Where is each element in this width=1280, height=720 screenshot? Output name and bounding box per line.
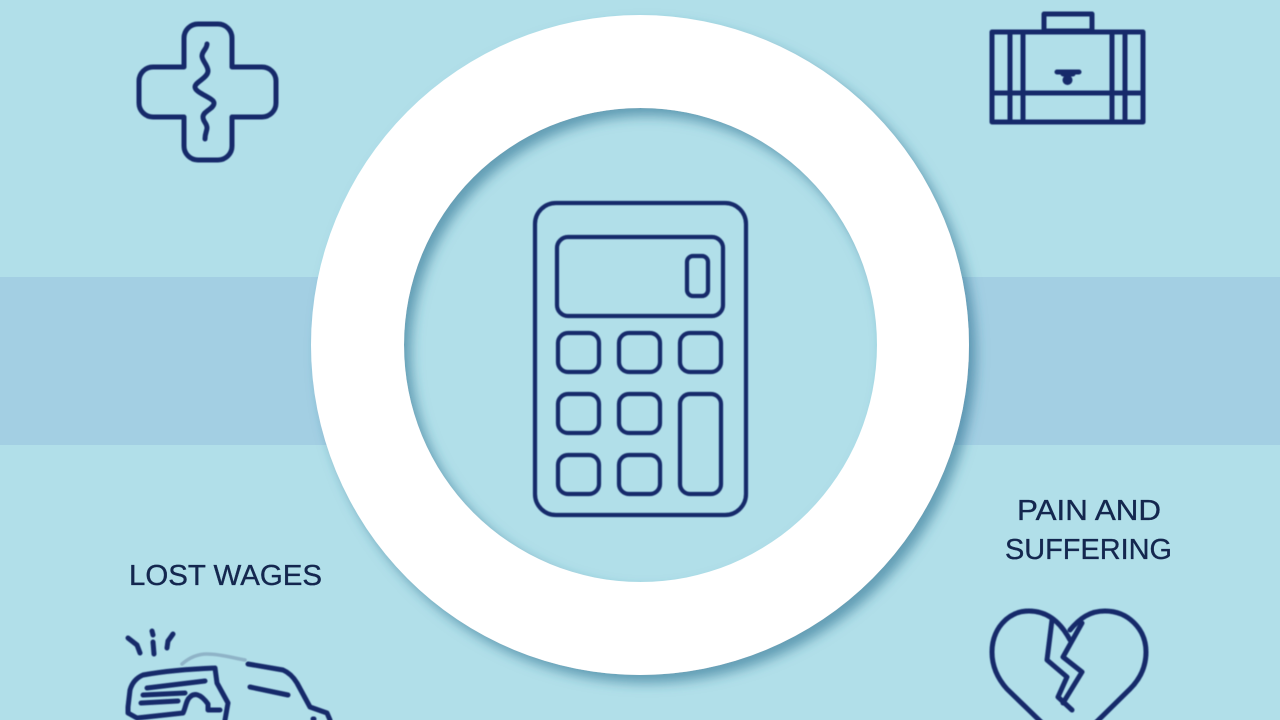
icon: broken heart	[992, 611, 1146, 720]
icon: crashed car	[128, 631, 330, 720]
hole fill	[400, 105, 880, 585]
label: lost wages: LOST WAGES	[129, 560, 322, 592]
icon: calculator	[535, 203, 746, 515]
label: pain and suffering: SUFFERING	[1005, 534, 1172, 566]
icon: medical cross with crack	[139, 24, 276, 160]
label: pain and suffering: PAIN AND	[1017, 495, 1161, 527]
icon: briefcase	[992, 14, 1143, 122]
horizontal band	[0, 277, 1280, 445]
label: pain and suffering	[1005, 495, 1172, 566]
white ring	[311, 15, 969, 675]
